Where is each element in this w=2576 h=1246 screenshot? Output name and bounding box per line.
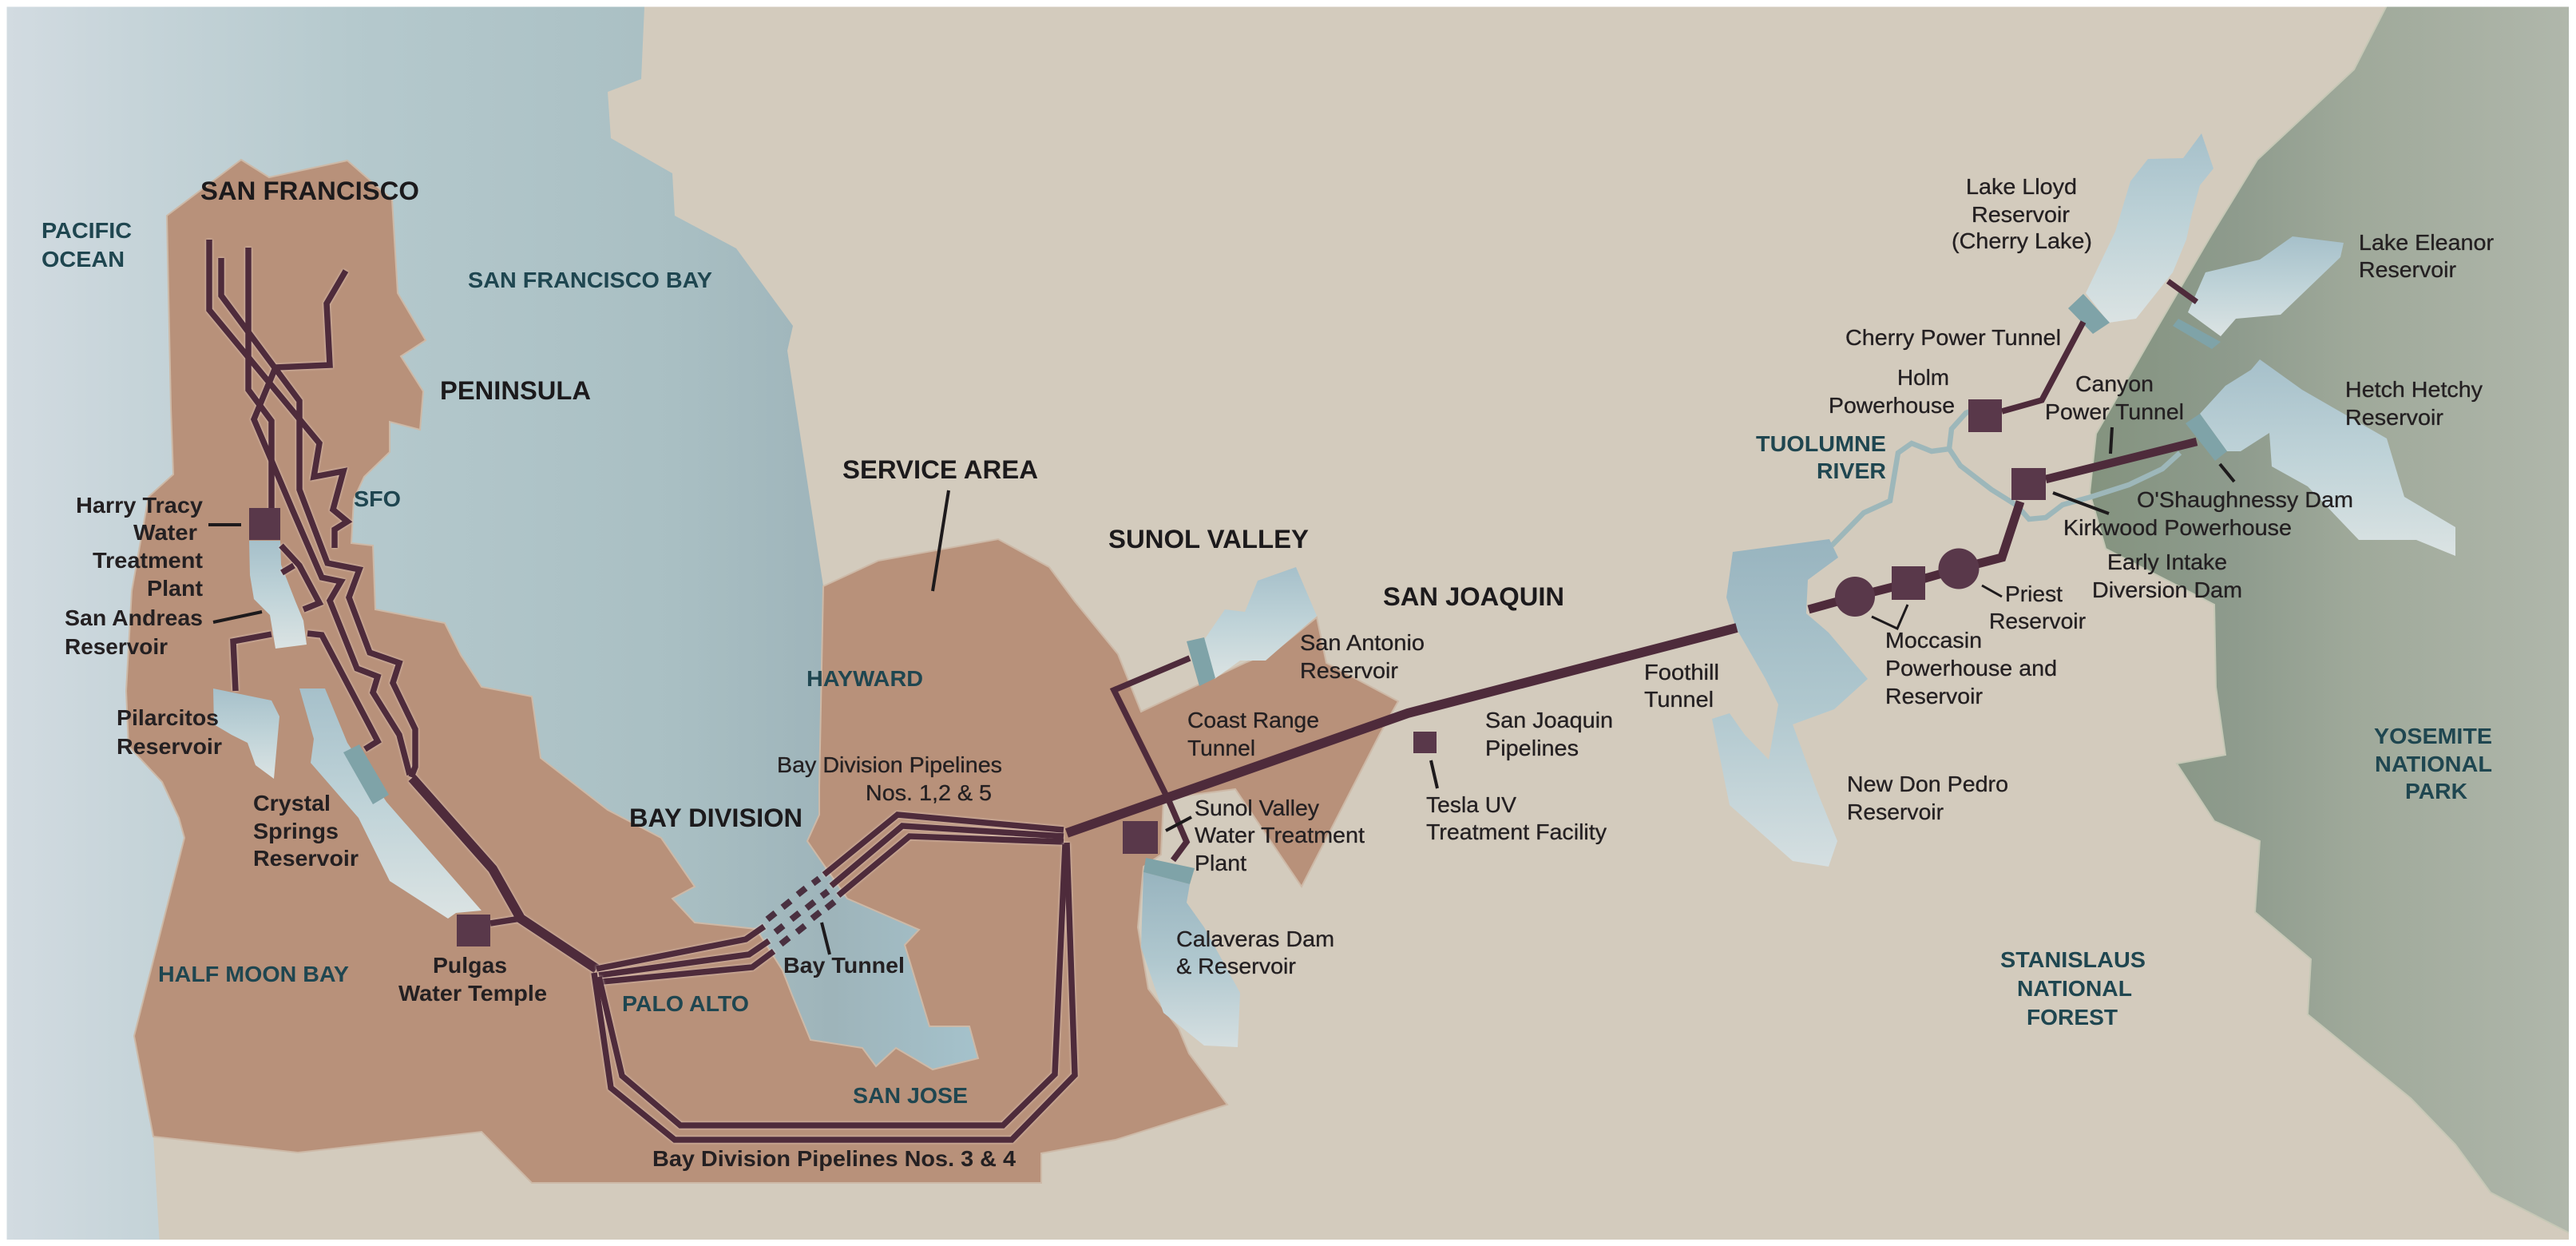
dam: Lake Lloyd [2068, 294, 2110, 334]
label: Pulgas Water Temple: Pulgas [433, 953, 507, 978]
label: Sunol Valley Water Treatment Plant: Plant [1195, 851, 1246, 875]
label: Tesla UV Treatment Facility: Tesla UV [1426, 792, 1516, 817]
lake: Pilarcitos Reservoir [213, 688, 279, 779]
pipelines: peninsula [209, 240, 596, 969]
label: Yosemite National Park: YOSEMITE [2374, 724, 2492, 748]
label: Holm Powerhouse: Powerhouse [1829, 393, 1955, 418]
label: Canyon Power Tunnel: Canyon [2075, 371, 2154, 396]
facility: Harry Tracy Water Treatment Plant [249, 508, 280, 540]
label: Early Intake Diversion Dam: Early Intake [2107, 550, 2227, 574]
label: Tesla UV Treatment Facility [1426, 792, 1607, 844]
dam: Calaveras [1143, 858, 1195, 884]
label: Harry Tracy Water Treatment Plant [76, 493, 203, 601]
lake: Calaveras Reservoir [1141, 872, 1240, 1047]
facility: Priest Reservoir [1939, 548, 1979, 589]
facility: Moccasin Powerhouse [1892, 566, 1925, 600]
label: Hetch Hetchy Reservoir [2345, 377, 2483, 430]
label: Yosemite National Park: NATIONAL [2375, 752, 2492, 776]
lake: New Don Pedro Reservoir [1712, 539, 1868, 867]
label: Calaveras Dam & Reservoir: Calaveras Dam [1176, 927, 1334, 951]
label: Priest Reservoir: Reservoir [1989, 609, 2086, 633]
label: Bay Division Pipelines Nos. 1,2 & 5 [777, 752, 1002, 805]
label: Bay Division Pipelines Nos. 1,2 & 5: Bay Division Pipelines [777, 752, 1002, 777]
label: San Joaquin Pipelines: San Joaquin [1485, 708, 1613, 732]
label: Priest Reservoir [1989, 581, 2086, 633]
label: San Andreas Reservoir: Reservoir [65, 634, 168, 659]
facility: Moccasin Reservoir [1835, 577, 1875, 617]
lake: Hetch Hetchy Reservoir [2200, 359, 2455, 556]
label: Tesla UV Treatment Facility: Treatment Facility [1426, 819, 1607, 844]
label: Lake Eleanor Reservoir [2359, 230, 2494, 282]
label: Peninsula: PENINSULA [440, 376, 591, 405]
label: Pilarcitos Reservoir [117, 705, 222, 759]
facility: Tesla UV Treatment Facility [1413, 732, 1437, 753]
label: Pacific Ocean [42, 218, 132, 272]
label: Foothill Tunnel: Tunnel [1644, 687, 1714, 712]
label: Pacific Ocean: PACIFIC [42, 218, 132, 243]
pipeline: San Joaquin and Foothill Tunnel [1067, 628, 1737, 833]
label: San Francisco: SAN FRANCISCO [200, 177, 419, 205]
label: Stanislaus National Forest [2000, 947, 2146, 1030]
dam: Lake Eleanor [2173, 319, 2221, 349]
label: Coast Range Tunnel [1187, 708, 1319, 760]
label: Palo Alto: PALO ALTO [622, 991, 749, 1016]
label: Pilarcitos Reservoir: Pilarcitos [117, 705, 219, 730]
label: Crystal Springs Reservoir: Springs [253, 819, 339, 843]
label: Harry Tracy Water Treatment Plant: Water [133, 520, 197, 545]
label: Crystal Springs Reservoir [253, 791, 359, 871]
service area [126, 160, 1398, 1183]
label: Stanislaus National Forest: NATIONAL [2017, 976, 2132, 1001]
label: Canyon Power Tunnel [2045, 371, 2184, 424]
label: Lake Lloyd Reservoir (Cherry Lake) [1952, 174, 2092, 253]
label: Stanislaus National Forest: STANISLAUS [2000, 947, 2146, 972]
label: Hetch Hetchy Reservoir: Reservoir [2345, 405, 2443, 430]
label: Cherry Power Tunnel: Cherry Power Tunnel [1845, 325, 2061, 350]
label: Canyon Power Tunnel: Power Tunnel [2045, 399, 2184, 424]
label: Sunol Valley Water Treatment Plant [1195, 796, 1365, 875]
label: San Antonio Reservoir: Reservoir [1300, 658, 1398, 683]
label: Bay Division: BAY DIVISION [629, 804, 803, 832]
label: New Don Pedro Reservoir: Reservoir [1847, 800, 1944, 824]
label: Coast Range Tunnel: Tunnel [1187, 736, 1255, 760]
label: Bay Division Pipelines Nos. 3 & 4: Bay Division Pipelines Nos. 3 & 4 [652, 1146, 1016, 1171]
label: Early Intake Diversion Dam: Diversion Dam [2092, 577, 2242, 602]
label: Harry Tracy Water Treatment Plant: Harry Tracy [76, 493, 203, 518]
label: Sunol Valley Water Treatment Plant: Water Treatment [1195, 823, 1365, 847]
lake: Lake Eleanor [2188, 236, 2344, 336]
leader lines [208, 427, 2234, 954]
label: Bay Tunnel: Bay Tunnel [783, 953, 905, 978]
label: Lake Lloyd Reservoir (Cherry Lake): Lake Lloyd [1966, 174, 2077, 199]
label: Tuolumne River [1756, 431, 1886, 483]
label: Pilarcitos Reservoir: Reservoir [117, 734, 222, 759]
label: Hetch Hetchy Reservoir: Hetch Hetchy [2345, 377, 2483, 402]
label: Yosemite National Park [2374, 724, 2492, 804]
label: Yosemite National Park: PARK [2405, 779, 2467, 804]
label: Calaveras Dam & Reservoir [1176, 927, 1334, 978]
label: San Antonio Reservoir: San Antonio [1300, 630, 1425, 655]
Yosemite National Park land [2090, 0, 2576, 1236]
facility: Kirkwood Powerhouse [2011, 468, 2046, 500]
label: Calaveras Dam & Reservoir: & Reservoir [1176, 954, 1296, 978]
lake: San Andreas Reservoir [249, 541, 307, 649]
label: Crystal Springs Reservoir: Reservoir [253, 846, 359, 871]
river: Tuolumne [1832, 411, 2180, 546]
label: San Jose: SAN JOSE [853, 1083, 968, 1108]
dam: Crystal Springs [343, 744, 389, 804]
label: Moccasin Powerhouse and Reservoir [1885, 628, 2057, 708]
label: Moccasin Powerhouse and Reservoir: Powerhouse and [1885, 656, 2057, 681]
label: Pulgas Water Temple: Water Temple [398, 981, 547, 1006]
dam: O'Shaughnessy [2186, 414, 2227, 461]
label: Moccasin Powerhouse and Reservoir: Moccasin [1885, 628, 1982, 653]
dam: San Antonio [1187, 637, 1215, 686]
label: Stanislaus National Forest: FOREST [2027, 1005, 2118, 1030]
lake: Lake Lloyd [2086, 133, 2213, 323]
label: Lake Lloyd Reservoir (Cherry Lake): Reservoir [1972, 202, 2070, 227]
label: Lake Eleanor Reservoir: Lake Eleanor [2359, 230, 2494, 255]
label: San Andreas Reservoir [65, 605, 203, 659]
label: Moccasin Powerhouse and Reservoir: Reservoir [1885, 684, 1983, 708]
label: Pulgas Water Temple [398, 953, 547, 1006]
pipelines: Bay Tunnel dashes [767, 879, 834, 944]
label: Holm Powerhouse [1829, 365, 1955, 418]
label: Service Area: SERVICE AREA [842, 455, 1038, 484]
label: Foothill Tunnel [1644, 660, 1719, 712]
label: Early Intake Diversion Dam [2092, 550, 2242, 602]
label: Half Moon Bay: HALF MOON BAY [158, 962, 349, 986]
label: Coast Range Tunnel: Coast Range [1187, 708, 1319, 732]
label: Crystal Springs Reservoir: Crystal [253, 791, 331, 815]
label: Sunol Valley: SUNOL VALLEY [1108, 525, 1309, 554]
label: San Joaquin: SAN JOAQUIN [1383, 582, 1564, 611]
facility: Pulgas Water Temple [457, 915, 490, 946]
label: Lake Eleanor Reservoir: Reservoir [2359, 257, 2456, 282]
label: Foothill Tunnel: Foothill [1644, 660, 1719, 685]
label: Harry Tracy Water Treatment Plant: Plant [147, 576, 203, 601]
pipelines: Bay Division west of tunnel [596, 927, 774, 982]
label: Pacific Ocean: OCEAN [42, 247, 125, 272]
label: Priest Reservoir: Priest [2005, 581, 2063, 606]
pipelines: Bay Division Nos. 3 & 4 [594, 843, 1075, 1140]
pipelines: Bay Division Nos. 1,2 & 5 [824, 815, 1064, 895]
pipeline: Mountain Tunnel to Kirkwood [1809, 281, 2197, 609]
lake: San Antonio Reservoir [1204, 567, 1317, 679]
label: Hayward: HAYWARD [806, 666, 923, 691]
label: Holm Powerhouse: Holm [1897, 365, 1949, 390]
label: Kirkwood Powerhouse: Kirkwood Powerhouse [2063, 515, 2292, 540]
label: Tuolumne River: TUOLUMNE [1756, 431, 1886, 456]
label: New Don Pedro Reservoir: New Don Pedro [1847, 772, 2008, 796]
label: San Joaquin Pipelines: Pipelines [1485, 736, 1579, 760]
label: New Don Pedro Reservoir [1847, 772, 2008, 824]
label: O'Shaughnessy Dam: O'Shaughnessy Dam [2137, 487, 2353, 512]
label: Bay Division Pipelines Nos. 1,2 & 5: Nos. 1,2 & 5 [866, 780, 992, 805]
label: Lake Lloyd Reservoir (Cherry Lake): (Cherry Lake) [1952, 228, 2092, 253]
label: San Andreas Reservoir: San Andreas [65, 605, 203, 630]
facility: Holm Powerhouse [1968, 399, 2002, 432]
ocean and bay water [0, 0, 1038, 1246]
label: Harry Tracy Water Treatment Plant: Treatment [93, 548, 203, 573]
label: San Francisco Bay: SAN FRANCISCO BAY [468, 268, 712, 292]
facility: Sunol Valley Water Treatment Plant [1123, 821, 1158, 854]
label: Sunol Valley Water Treatment Plant: Sunol Valley [1195, 796, 1319, 820]
reservoirs [213, 133, 2455, 1047]
label: San Joaquin Pipelines [1485, 708, 1613, 760]
lake: Crystal Springs Reservoir [299, 688, 482, 919]
pipeline: Sunol Valley connector [1114, 658, 1190, 860]
label: San Antonio Reservoir [1300, 630, 1425, 683]
label: Tuolumne River: RIVER [1817, 458, 1886, 483]
label: SFO: SFO [354, 486, 401, 511]
